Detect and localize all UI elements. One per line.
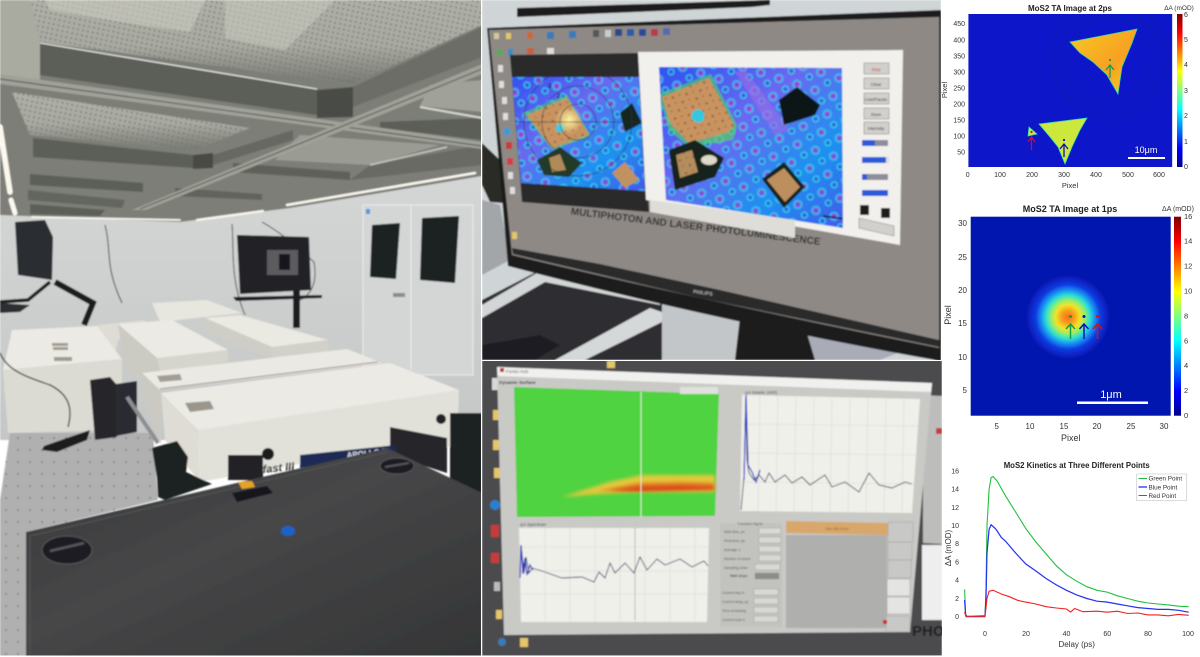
blue point curve bbox=[965, 525, 1189, 616]
colour bar: 4 bbox=[1184, 361, 1188, 370]
right monitor on stand bbox=[233, 235, 322, 328]
colour bar: 0 bbox=[1184, 164, 1188, 171]
heatmap bbox=[971, 217, 1171, 416]
x axis: 15 bbox=[1060, 422, 1069, 431]
x axis: 400 bbox=[1090, 172, 1102, 179]
x axis bbox=[994, 422, 1169, 431]
y axis: 2 bbox=[955, 596, 959, 603]
second window edge at right bbox=[912, 394, 942, 636]
colour bar: 4 bbox=[1184, 62, 1188, 69]
white analysis software window bbox=[638, 50, 903, 245]
scale bar bbox=[1128, 145, 1165, 159]
x axis: 0 bbox=[966, 172, 970, 179]
wall bbox=[0, 176, 482, 440]
colour bar: 1 bbox=[1184, 139, 1188, 146]
x axis: 60 bbox=[1103, 631, 1111, 638]
colour bar: 14 bbox=[1184, 236, 1192, 246]
colour bar: 2 bbox=[1184, 113, 1188, 120]
desktop icons at left bbox=[490, 361, 615, 647]
acquisition controls: Time remaining bbox=[722, 609, 746, 613]
x axis: 300 bbox=[1058, 172, 1070, 179]
y axis: 4 bbox=[955, 578, 959, 584]
y axis: 10 bbox=[958, 353, 968, 362]
acquisition controls: Final time, ps bbox=[724, 539, 745, 543]
chart: MoS2 kinetics at three points bbox=[944, 461, 1194, 649]
colour bar: 6 bbox=[1184, 12, 1188, 19]
y axis: 400 bbox=[953, 38, 965, 44]
y axis: 25 bbox=[958, 253, 968, 262]
y axis: 8 bbox=[955, 541, 959, 548]
ceiling with perforated panels and beams bbox=[0, 0, 482, 222]
acquisition controls: Current scan # bbox=[722, 618, 745, 622]
x axis: 100 bbox=[1182, 631, 1194, 638]
x axis: 80 bbox=[1144, 631, 1152, 638]
software control buttons: Save bbox=[871, 112, 882, 117]
spectrum plot bbox=[519, 522, 709, 622]
x axis: 20 bbox=[1093, 422, 1102, 431]
kinetic plot bbox=[740, 390, 920, 513]
red stop indicator bbox=[883, 620, 887, 624]
kinetic plot: ΔA Kinetic (400) bbox=[745, 390, 778, 395]
window title bar bbox=[497, 367, 932, 392]
monitor stand bbox=[734, 320, 816, 360]
dark image viewer window with microscopy image bbox=[505, 53, 650, 212]
window title bar: Dynamic Surface bbox=[499, 380, 536, 385]
dark image viewer window with microscopy image: 3 bbox=[548, 84, 552, 90]
chart title: MoS2 TA Image at 2ps bbox=[1028, 4, 1113, 13]
taskbar bbox=[512, 248, 939, 347]
legend bbox=[1137, 474, 1187, 501]
y axis label: Pixel bbox=[943, 305, 953, 325]
y axis label: ΔA (mOD) bbox=[944, 529, 953, 566]
x axis label: Pixel bbox=[1062, 181, 1078, 190]
spectrum plot: ΔA Spectrum bbox=[520, 522, 547, 527]
y axis: 10 bbox=[951, 523, 959, 530]
acquisition controls: Number of scans bbox=[724, 557, 751, 561]
x axis: 30 bbox=[1160, 422, 1169, 431]
colour bar bbox=[1177, 12, 1188, 171]
software window bbox=[497, 367, 932, 635]
y axis: 300 bbox=[953, 70, 965, 76]
monitor screen bbox=[489, 17, 939, 348]
colour scale label: ΔA (mOD) bbox=[1164, 5, 1194, 12]
y axis: 50 bbox=[957, 150, 965, 156]
black instrument lid bbox=[26, 448, 482, 657]
ceiling light strips bbox=[0, 127, 475, 220]
x axis bbox=[966, 172, 1165, 179]
double door bbox=[363, 205, 473, 375]
orange status bar and grey panel bbox=[786, 521, 889, 628]
y axis bbox=[953, 21, 965, 156]
x axis label: Delay (ps) bbox=[1058, 640, 1095, 649]
acquisition controls: Wait steps bbox=[730, 574, 747, 578]
y axis: 450 bbox=[953, 21, 965, 28]
black optical mounts and rail bbox=[90, 377, 482, 500]
laser enclosure boxes bbox=[3, 300, 459, 482]
x axis: 10 bbox=[1026, 422, 1035, 431]
x axis: 20 bbox=[1022, 631, 1030, 638]
colour bar: 8 bbox=[1184, 312, 1188, 320]
colour bar: 10 bbox=[1184, 286, 1192, 296]
desktop wallpaper label: MULTIPHOTON AND LASER PHOTOLUMINESCENCE bbox=[570, 206, 821, 248]
software control buttons: Clear bbox=[871, 82, 882, 87]
y axis: 200 bbox=[953, 102, 965, 108]
cable and power supply bbox=[0, 353, 90, 452]
acquisition controls: Start time, ps bbox=[724, 530, 745, 534]
y axis: 150 bbox=[953, 118, 965, 124]
orange status bar and grey panel: Max 360.00 ps bbox=[826, 527, 849, 531]
acquisition controls: Current delay, ps bbox=[722, 600, 749, 604]
acquisition controls bbox=[720, 522, 782, 627]
y axis: 5 bbox=[963, 386, 968, 395]
second window edge at right: PHO bbox=[912, 623, 945, 640]
heatmap bbox=[968, 0, 1172, 167]
monitor bezel bbox=[487, 10, 941, 361]
chart: MoS2 TA image at 1 ps bbox=[943, 204, 1194, 443]
legend: Red Point bbox=[1148, 493, 1176, 500]
brand band on enclosure: fast III bbox=[262, 461, 296, 476]
x axis: 25 bbox=[1127, 422, 1136, 431]
y axis: 20 bbox=[958, 286, 968, 295]
software control buttons: Intensity bbox=[868, 126, 885, 131]
colour bar: 12 bbox=[1184, 262, 1192, 270]
y axis: 30 bbox=[958, 219, 968, 228]
colour bar bbox=[1174, 212, 1192, 420]
x axis: 0 bbox=[983, 631, 987, 638]
scale bar bbox=[1077, 389, 1148, 404]
y axis: 12 bbox=[951, 505, 959, 512]
dynamic surface heatmap bbox=[514, 387, 719, 517]
y axis: 350 bbox=[953, 54, 965, 60]
hanging cable bbox=[105, 225, 122, 303]
x axis: 600 bbox=[1153, 172, 1165, 179]
y axis: 15 bbox=[958, 319, 968, 328]
x axis: 40 bbox=[1063, 631, 1070, 638]
right hand buttons bbox=[886, 522, 913, 632]
acquisition controls: Sampling order bbox=[724, 566, 749, 570]
chart title: MoS2 Kinetics at Three Different Points bbox=[1004, 461, 1150, 470]
brand band on enclosure: APOLLO-T bbox=[346, 447, 388, 460]
y axis: 6 bbox=[955, 560, 959, 566]
panel: laboratory photograph bbox=[0, 0, 482, 657]
monitor brand: PHILIPS bbox=[693, 289, 713, 298]
panel: pump-probe software screenshot bbox=[482, 360, 945, 656]
y axis: 14 bbox=[951, 486, 959, 494]
markers and arrows bbox=[1028, 59, 1114, 157]
software control buttons bbox=[864, 63, 889, 134]
legend: Blue Point bbox=[1148, 484, 1177, 492]
y axis: 100 bbox=[953, 134, 965, 140]
background equipment bbox=[482, 143, 900, 360]
acquisition controls: Average, s bbox=[724, 548, 741, 552]
markers and arrows bbox=[1066, 315, 1102, 339]
x axis bbox=[983, 631, 1194, 638]
y axis bbox=[958, 219, 968, 395]
window title bar: Femto Hub bbox=[506, 369, 529, 374]
acquisition controls: Transient Signal bbox=[737, 522, 763, 526]
acquisition controls: Current step # bbox=[722, 591, 744, 595]
colour bar: 2 bbox=[1184, 386, 1188, 395]
y axis: 250 bbox=[953, 86, 965, 92]
y axis bbox=[951, 468, 959, 621]
y axis: 0 bbox=[955, 614, 959, 621]
x axis: 500 bbox=[1122, 172, 1134, 179]
x axis label: Pixel bbox=[1061, 433, 1080, 443]
colour bar: 16 bbox=[1184, 212, 1192, 221]
desktop icons bbox=[494, 28, 670, 239]
green point curve bbox=[965, 477, 1189, 617]
shelf above monitor bbox=[517, 0, 770, 17]
colour bar: 3 bbox=[1184, 88, 1188, 95]
software control buttons: Stop bbox=[871, 67, 881, 72]
scale bar: 10μm bbox=[1135, 145, 1157, 155]
analysed microscopy image bbox=[658, 66, 844, 229]
scale bar: 1μm bbox=[1100, 389, 1122, 401]
x axis: 5 bbox=[994, 422, 999, 431]
red point curve bbox=[965, 590, 1189, 617]
left monitor on arm bbox=[0, 220, 93, 325]
colour bar: 5 bbox=[1184, 37, 1188, 44]
software control buttons: Live/Pause bbox=[865, 97, 888, 102]
optical table bbox=[0, 433, 158, 657]
brand band on enclosure bbox=[262, 445, 396, 476]
dark image viewer window with microscopy image: 2 bbox=[557, 94, 561, 100]
software sliders bbox=[859, 140, 894, 236]
colour scale label: ΔA (mOD) bbox=[1162, 206, 1194, 213]
colour bar: 0 bbox=[1184, 411, 1188, 420]
chart: MoS2 TA image at 2 ps bbox=[940, 0, 1194, 190]
monitor cables bbox=[232, 222, 315, 315]
y axis: 16 bbox=[951, 468, 959, 476]
y axis label: Pixel bbox=[940, 82, 949, 98]
x axis: 100 bbox=[994, 172, 1006, 179]
x axis: 200 bbox=[1026, 172, 1038, 179]
legend: Green Point bbox=[1148, 476, 1182, 482]
colour bar: 6 bbox=[1184, 336, 1188, 346]
panel: curved monitor photograph bbox=[482, 0, 941, 361]
chart title: MoS2 TA Image at 1ps bbox=[1023, 204, 1117, 214]
